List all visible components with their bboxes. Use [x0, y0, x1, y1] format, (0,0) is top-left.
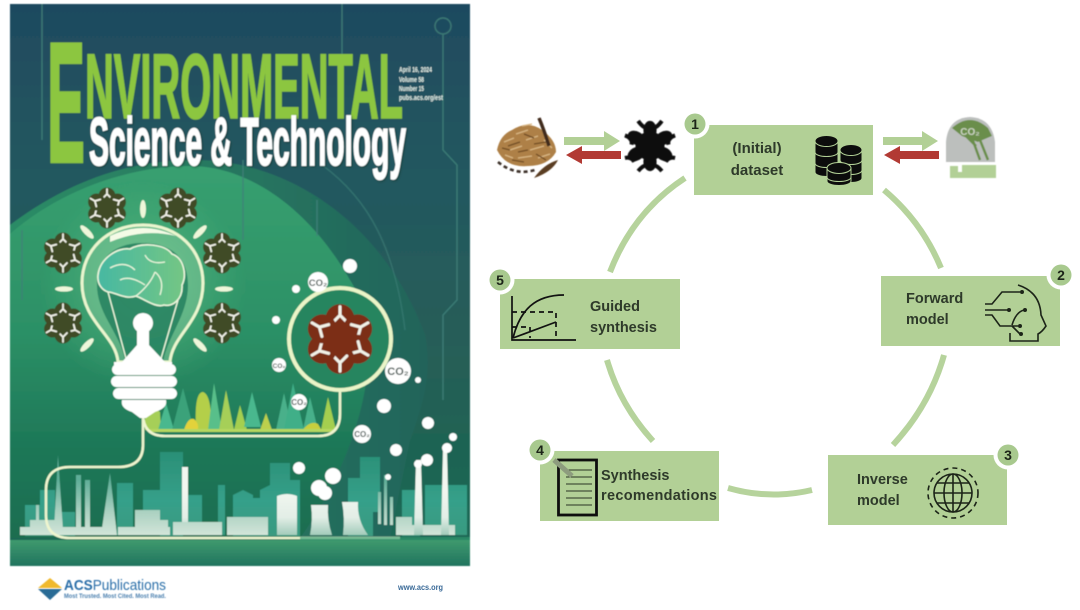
- icon: biomass pile: [497, 118, 558, 178]
- icon: AI head: [985, 285, 1046, 341]
- circuit lines: [22, 4, 457, 400]
- icon: black biochar flake: [625, 121, 675, 171]
- issue details: Volume 58: [399, 75, 424, 84]
- box 3: inverse model: [828, 440, 1022, 525]
- box 1: initial dataset: 1: [691, 116, 699, 132]
- icon: database: [815, 136, 862, 186]
- CO2 labels: CO₂: [291, 398, 307, 407]
- icon: line graph: [512, 295, 576, 340]
- CO2 bubbles: [272, 259, 457, 500]
- footer: website: www.acs.org: [397, 582, 443, 592]
- title: Environmental: [47, 7, 403, 199]
- icon: globe: [928, 468, 978, 518]
- footer: ACS Publications logo: ACSPublications: [64, 577, 166, 594]
- panel: workflow cycle: [486, 110, 1076, 525]
- box 1: initial dataset: [680, 110, 873, 195]
- icon: lightbulb: [82, 225, 203, 418]
- icon: clipboard with pencil: [554, 460, 596, 515]
- biochar flakes around bulb: [41, 188, 244, 344]
- box 2: forward model: [881, 260, 1076, 346]
- cover background: [10, 4, 470, 566]
- inner arch: [10, 166, 369, 538]
- ring with biochar: [289, 288, 391, 390]
- panel: journal cover: [10, 4, 470, 566]
- light rays: [55, 200, 233, 353]
- issue details: pubs.acs.org/est: [399, 93, 443, 102]
- arrow: dataset to application: [883, 131, 938, 151]
- box 3: inverse model: model: [857, 493, 900, 509]
- light pipe: [46, 390, 400, 538]
- icon: CO2 plant dome: [946, 117, 996, 178]
- glow behind bulb: [38, 180, 248, 390]
- CO2 labels: CO₂: [309, 278, 327, 289]
- filament and screw base: [111, 313, 177, 418]
- cycle arcs: [607, 178, 944, 495]
- trees in forest: [145, 383, 336, 432]
- icon: CO2 plant dome: CO₂: [960, 127, 980, 138]
- issue details: April 16, 2024: [399, 65, 433, 74]
- box 4: synthesis recommendations: recomendations: [601, 488, 717, 504]
- box 2: forward model: Forward: [906, 291, 963, 307]
- CO2 labels: CO₂: [354, 430, 370, 439]
- issue details: Number 15: [399, 84, 424, 93]
- skyline: back layer: [25, 452, 467, 536]
- ground band: [10, 540, 470, 566]
- box 5: guided synthesis: synthesis: [590, 320, 657, 336]
- box 1: initial dataset: dataset: [731, 162, 783, 179]
- icon: brain: [98, 245, 184, 306]
- box 4: synthesis recommendations: [526, 436, 719, 521]
- box 4: synthesis recommendations: Synthesis: [601, 468, 670, 484]
- box 2: forward model: model: [906, 312, 949, 328]
- footer: ACS Publications logo: Most Trusted. Most Cited. Most Read.: [64, 593, 166, 600]
- arrow: biochar to biomass: [566, 146, 621, 164]
- skyline: front layer: [20, 455, 455, 535]
- arrow: application to dataset: [884, 146, 939, 164]
- panel: journal cover: NVIRONMENTAL: [85, 36, 403, 138]
- box 5: guided synthesis: Guided: [590, 299, 640, 315]
- footer: ACS Publications logo: [38, 577, 166, 600]
- box 2: forward model: 2: [1057, 267, 1065, 283]
- CO2 labels: CO₂: [273, 363, 285, 370]
- outer arch: [10, 160, 428, 538]
- box 3: inverse model: 3: [1004, 447, 1012, 463]
- arrow: biomass to biochar: [564, 131, 620, 151]
- box 4: synthesis recommendations: 4: [536, 442, 544, 458]
- box 5: guided synthesis: [486, 266, 680, 349]
- title: Environmental: E: [47, 7, 85, 199]
- panel: journal cover: Science & Technology: [89, 104, 406, 180]
- CO2 labels: [273, 278, 409, 439]
- issue details: [399, 65, 443, 102]
- CO2 labels: CO₂: [387, 366, 409, 378]
- box 5: guided synthesis: 5: [496, 272, 504, 288]
- box 3: inverse model: Inverse: [857, 472, 908, 488]
- box 1: initial dataset: (Initial): [732, 140, 782, 157]
- skyline: chimneys and cooling towers: [182, 448, 449, 535]
